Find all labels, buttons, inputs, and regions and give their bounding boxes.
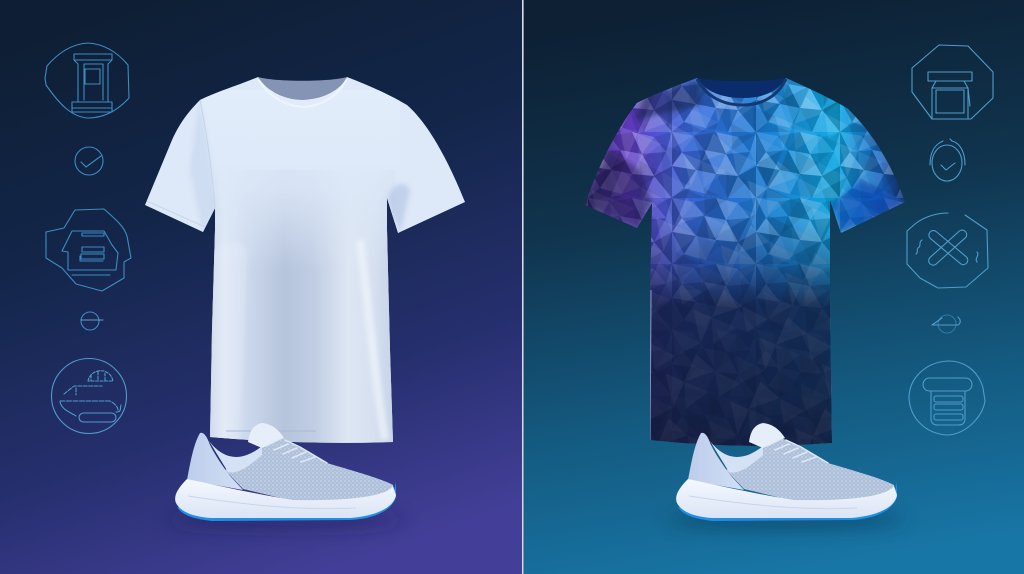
patterned t-shirt [584,70,906,450]
icon: circled stack of trays [909,361,985,435]
divider line [522,0,524,574]
shoe: right white sneaker [676,423,897,521]
panel: right background [524,0,1024,574]
icon: circled stacked grid [52,358,126,434]
shadow under left shoe [165,513,405,527]
icon: small minus circle left [81,312,103,330]
panel: left background [0,0,522,574]
icon: crossed bars octagon [907,213,988,288]
icon: small lens right [932,315,960,333]
white t-shirt [145,77,465,455]
icon: circled kiosk [45,43,129,118]
icon: check circle left [75,147,103,175]
icon: octagon printer box [912,45,993,119]
shoe: left white sneaker [175,423,396,521]
icon: box in jagged outline [46,209,131,291]
icon: check oval right [930,139,965,181]
shadow under right shoe [666,513,906,527]
